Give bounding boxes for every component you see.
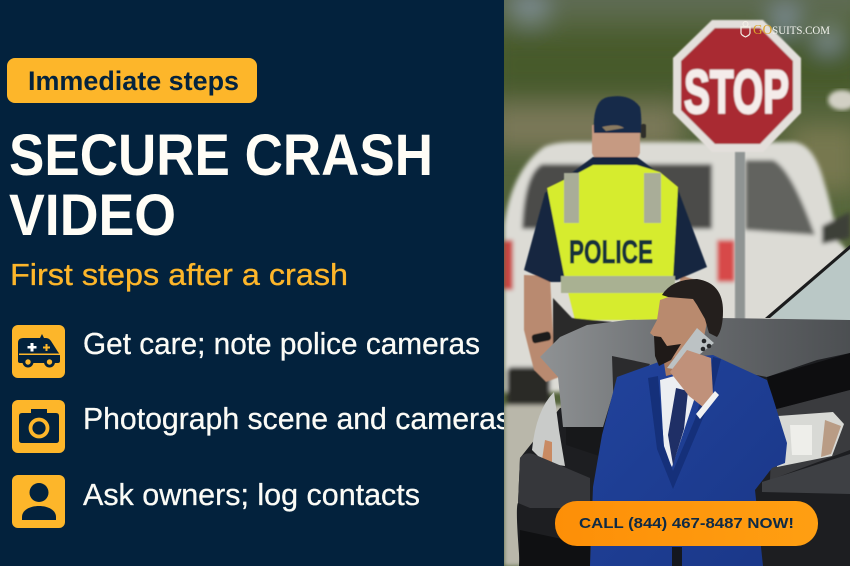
- badge: immediate steps: [7, 58, 257, 103]
- icon: person: [12, 475, 65, 528]
- neck: [664, 357, 675, 376]
- list item: get care: [12, 325, 480, 378]
- hi-vis vest: POLICE: [569, 234, 653, 270]
- sleeve cuff: [696, 391, 719, 419]
- man in blue suit: [590, 279, 787, 566]
- suit jacket: [590, 355, 787, 566]
- title: VIDEO: [9, 183, 176, 248]
- crumpled hood: [540, 318, 850, 427]
- hand: [670, 350, 713, 407]
- bumper: [518, 453, 590, 508]
- stop sign: STOP: [684, 58, 789, 126]
- windshield: [770, 249, 850, 324]
- list item: photograph: [12, 400, 511, 453]
- officer cap: [594, 96, 641, 133]
- officer shirt: [524, 157, 707, 282]
- call to action button: CALL (844) 467-8487 NOW!: [579, 515, 794, 532]
- text: photograph: Photograph scene and cameras: [83, 401, 511, 436]
- blurred background foliage: [490, 0, 850, 566]
- title: [9, 123, 433, 248]
- subtitle: First steps after a crash: [10, 257, 348, 292]
- right headlight: [777, 412, 844, 467]
- sign pole: [735, 150, 745, 320]
- list item: ask owners: [12, 475, 420, 528]
- title: SECURE CRASH: [9, 123, 433, 188]
- head: [650, 297, 706, 358]
- panel: left navy text panel: [0, 0, 511, 566]
- text: get care: Get care; note police cameras: [83, 326, 480, 361]
- phone: [667, 328, 714, 370]
- police officer: [524, 96, 711, 382]
- stop sign: [673, 20, 801, 320]
- car body: [517, 338, 850, 566]
- logo lock icon: [741, 22, 750, 37]
- badge: immediate steps: Immediate steps: [28, 66, 239, 96]
- hi-vis vest: [547, 165, 678, 320]
- shirt: [660, 376, 694, 467]
- panel: crash scene photo: [490, 0, 850, 566]
- officer arms: [524, 275, 562, 382]
- hair: [662, 279, 723, 337]
- duty belt and holster: [552, 298, 612, 344]
- shirt gap below button: [672, 547, 682, 566]
- left headlight: [532, 392, 565, 466]
- officer head: [592, 124, 641, 158]
- white truck: [504, 142, 850, 566]
- icon: camera: [12, 400, 65, 453]
- lapel shading: [648, 357, 721, 489]
- damaged black car: [517, 245, 850, 566]
- logo text: GOSUITS.COM: [753, 23, 830, 38]
- tie: [668, 388, 688, 465]
- text: ask owners: Ask owners; log contacts: [83, 477, 420, 512]
- call to action button: [555, 501, 818, 546]
- beard: [654, 336, 681, 366]
- icon: ambulance: [12, 325, 65, 378]
- logo: GoSuits.com: [741, 22, 830, 38]
